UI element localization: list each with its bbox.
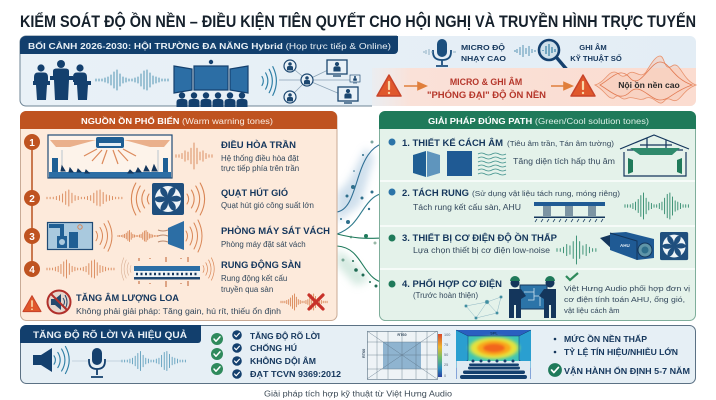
timeline spine — [31, 142, 33, 269]
arrow — [404, 82, 426, 90]
text: floor vibration: RUNG ĐỘNG SÀN — [221, 259, 301, 270]
number 2 — [24, 190, 40, 206]
number 4: 4 — [29, 265, 35, 276]
solution 3: low-noise equipment — [388, 232, 688, 264]
illustration: AHU: AHU — [620, 243, 630, 248]
item 3: machine room — [24, 220, 330, 252]
node 2 — [388, 188, 396, 196]
number 3: 3 — [29, 232, 35, 243]
label: sensitive mic: NHẠY CAO — [461, 54, 506, 63]
text: absorption: Tăng diện tích hấp thụ âm — [513, 157, 615, 166]
text: volume warning: TĂNG ÂM LƯỢNG LOA — [76, 292, 179, 303]
node 4 — [388, 280, 396, 288]
label: digital recording — [570, 43, 622, 63]
benefits list: KHÔNG DỘI ÂM — [250, 357, 316, 366]
node 3 — [388, 234, 396, 242]
number 1 — [24, 134, 40, 150]
solutions header: GIẢI PHÁP ĐÚNG PATH (Green/Cool solution tones) — [428, 115, 649, 126]
arcs — [121, 258, 131, 280]
icon: check — [566, 273, 578, 280]
band: amplified noise — [372, 56, 696, 106]
clarity header: TĂNG ĐỘ RÕ LỜI VÀ HIỆU QUẢ — [33, 329, 187, 340]
icon: green checks — [211, 333, 223, 375]
text: fan: QUẠT HÚT GIÓ — [221, 187, 288, 198]
arcs — [186, 220, 202, 252]
number 2: 2 — [29, 194, 35, 205]
high noise spikes: Nội ồn nền cao — [618, 80, 680, 90]
wave: AC noise — [176, 143, 212, 169]
text: coordination: cơ điện tính toán AHU, ống gió, — [564, 295, 685, 304]
illustration: engineers with blueprint — [509, 276, 556, 318]
benefits list: TĂNG ĐỘ RÕ LỜI — [250, 332, 320, 341]
arcs — [96, 221, 112, 251]
illustration: machine room — [48, 222, 92, 250]
icon: fan — [660, 232, 688, 260]
text: machine room: Phòng máy đặt sát vách — [221, 240, 306, 249]
icon: magnifier recording — [539, 40, 568, 71]
item 1: ceiling AC — [24, 134, 299, 178]
chart: RT60: 50 — [444, 353, 448, 357]
clarity header — [20, 325, 201, 343]
outcomes list: VẬN HÀNH ỔN ĐỊNH 5-7 NĂM — [564, 365, 690, 376]
text: AC: trực tiếp phía trên trần — [221, 164, 299, 173]
label: sensitive mic: MICRO ĐỘ — [461, 43, 505, 52]
arcs left — [131, 183, 149, 215]
icon: microphone — [89, 348, 105, 377]
line — [72, 360, 122, 362]
icon: red cross — [309, 295, 323, 309]
text: floor vibration: truyền qua sàn — [221, 285, 273, 294]
icon: speaker — [33, 346, 69, 374]
chart: RT60: 75 — [444, 343, 448, 347]
text: isolation: Tách rung kết cấu sàn, AHU — [413, 203, 521, 212]
solution 2: vibration isolation — [388, 187, 688, 222]
benefits list: CHỐNG HÚ — [250, 343, 297, 353]
solution 1: acoustic design — [388, 135, 689, 177]
icon: video wall and audience — [174, 60, 248, 107]
arrow — [551, 82, 572, 90]
label: sensitive mic — [461, 43, 506, 63]
number 1: 1 — [29, 138, 35, 149]
heading 1: 1. THIẾT KẾ CÁCH ÂM — [402, 137, 503, 148]
note 2: (Sử dụng vật liệu tách rung, móng riêng) — [472, 189, 620, 198]
text: amplify noise: MICRO & GHI ÂM — [450, 76, 522, 87]
arcs right — [187, 183, 205, 215]
heading 3: 3. THIẾT BỊ CƠ ĐIỆN ĐỘ ỒN THẤP — [402, 232, 557, 243]
chart: RT60: 25 — [444, 363, 448, 367]
panel: context 2026-2030 — [20, 36, 696, 107]
wave: podium sound — [96, 70, 168, 90]
illustration: treated room — [620, 135, 689, 176]
icon: signal arcs — [262, 67, 276, 95]
high noise spikes — [595, 56, 696, 103]
label: digital recording: KỸ THUẬT SỐ — [570, 53, 622, 63]
wave: vibration — [47, 260, 114, 278]
chart: SPL heatmap: SPL — [490, 332, 498, 336]
callout: raising speaker volume — [23, 290, 327, 316]
text: AC: Hệ thống điều hòa đặt — [221, 154, 299, 163]
wave: isolated — [625, 193, 688, 219]
note 4: (Trước hoàn thiện) — [413, 291, 478, 300]
text: AC — [221, 139, 299, 173]
solutions header — [379, 111, 696, 129]
chart: RT60: 0 — [444, 374, 446, 378]
heading 4: 4. PHỐI HỢP CƠ ĐIỆN — [402, 278, 502, 289]
icon: sensitive microphone — [423, 39, 456, 66]
text: AC: ĐIỀU HÒA TRẦN — [221, 139, 296, 150]
text: floor vibration — [221, 259, 301, 294]
wave: clear voice — [122, 352, 185, 370]
illustration: hall with ceiling AC — [48, 135, 172, 178]
text: volume warning — [76, 292, 281, 316]
icon: muted speaker — [48, 290, 70, 314]
outcomes list: TỶ LỆ TÍN HIỆU/NHIỄU LỚN — [564, 346, 678, 357]
panel: noise sources — [20, 111, 337, 320]
heading 2: 2. TÁCH RUNG — [402, 187, 469, 198]
illustration: floor slab — [134, 257, 200, 287]
wave: low noise — [557, 236, 596, 264]
wave: mic to recorder — [514, 45, 535, 57]
number 4 — [24, 261, 40, 277]
chart: RT60 — [362, 331, 450, 380]
icon: diffuser waves — [478, 153, 506, 175]
air lines — [158, 230, 168, 242]
text: machine room — [221, 225, 330, 249]
number 3 — [24, 228, 40, 244]
solution 4: MEP coordination — [388, 273, 690, 320]
text: coordination: vật liệu cách âm — [564, 306, 620, 315]
illustration: spring mounts — [534, 202, 605, 222]
icon: absorber panels — [413, 151, 440, 177]
text: fan — [221, 187, 314, 210]
icon: fan — [152, 183, 184, 215]
illustration: network mesh — [464, 296, 502, 320]
outcomes list — [548, 333, 690, 377]
icon: warning — [377, 75, 401, 96]
text: amplify noise: "PHÓNG ĐẠI" ĐỘ ỒN NỀN — [427, 89, 546, 100]
item 2: exhaust fan — [24, 183, 314, 215]
icon: warning — [571, 75, 595, 96]
text: low-noise: Lựa chọn thiết bị cơ điện low-noise — [413, 246, 550, 255]
wave: machine noise — [118, 230, 158, 242]
icon: speakers at podiums — [33, 60, 91, 100]
node 1 — [388, 138, 396, 146]
panel: solutions — [379, 111, 696, 320]
text: floor vibration: Rung động kết cấu — [221, 274, 287, 283]
context header bar — [20, 36, 398, 54]
text: coordination — [564, 284, 690, 315]
wall speaker shape — [168, 221, 184, 250]
connectors from sources to solutions — [337, 140, 392, 288]
chart: SPL heatmap — [456, 330, 531, 379]
illustration: AHU — [600, 232, 654, 260]
label: digital recording: GHI ÂM — [579, 43, 607, 52]
text: fan: Quạt hút gió công suất lớn — [221, 201, 314, 210]
chart: RT60: 100 — [444, 333, 450, 337]
benefits list — [232, 330, 342, 379]
text: machine room: PHÒNG MÁY SÁT VÁCH — [221, 225, 330, 236]
note 1: (Tiêu âm trần, Tán âm tường) — [507, 139, 614, 148]
icon: warning — [23, 296, 41, 312]
wave: fan noise — [47, 190, 122, 206]
text: coordination: Việt Hưng Audio phối hợp đơn vị — [564, 284, 690, 293]
chart: RT60: RT60 — [362, 349, 366, 358]
caption: Giải pháp tích hợp kỹ thuật từ Việt Hưng Audio — [264, 390, 453, 398]
benefits list: ĐẠT TCVN 9369:2012 — [250, 370, 342, 379]
context header bar: BỐI CẢNH 2026-2030: HỘI TRƯỜNG ĐA NĂNG Hybrid (Họp trực tiếp & Online) — [28, 40, 391, 51]
chart: RT60: RT60 — [397, 333, 407, 337]
noise sources header — [20, 111, 337, 129]
arcs — [203, 258, 214, 280]
icon: remote participants network — [279, 60, 360, 103]
item 4: floor vibration — [24, 257, 301, 294]
noise sources header: NGUỒN ỒN PHỔ BIẾN (Warm warning tones) — [81, 115, 273, 126]
text: amplify noise — [427, 76, 546, 100]
wave: feedback — [281, 294, 327, 310]
text: volume warning: Không phải giải pháp: Tăng gain, hú rít, thiếu ổn định — [76, 307, 281, 316]
icon: perforated panel — [447, 151, 472, 176]
panel: clarity and effectiveness — [20, 325, 696, 384]
outcomes list: MỨC ỒN NỀN THẤP — [564, 333, 647, 344]
